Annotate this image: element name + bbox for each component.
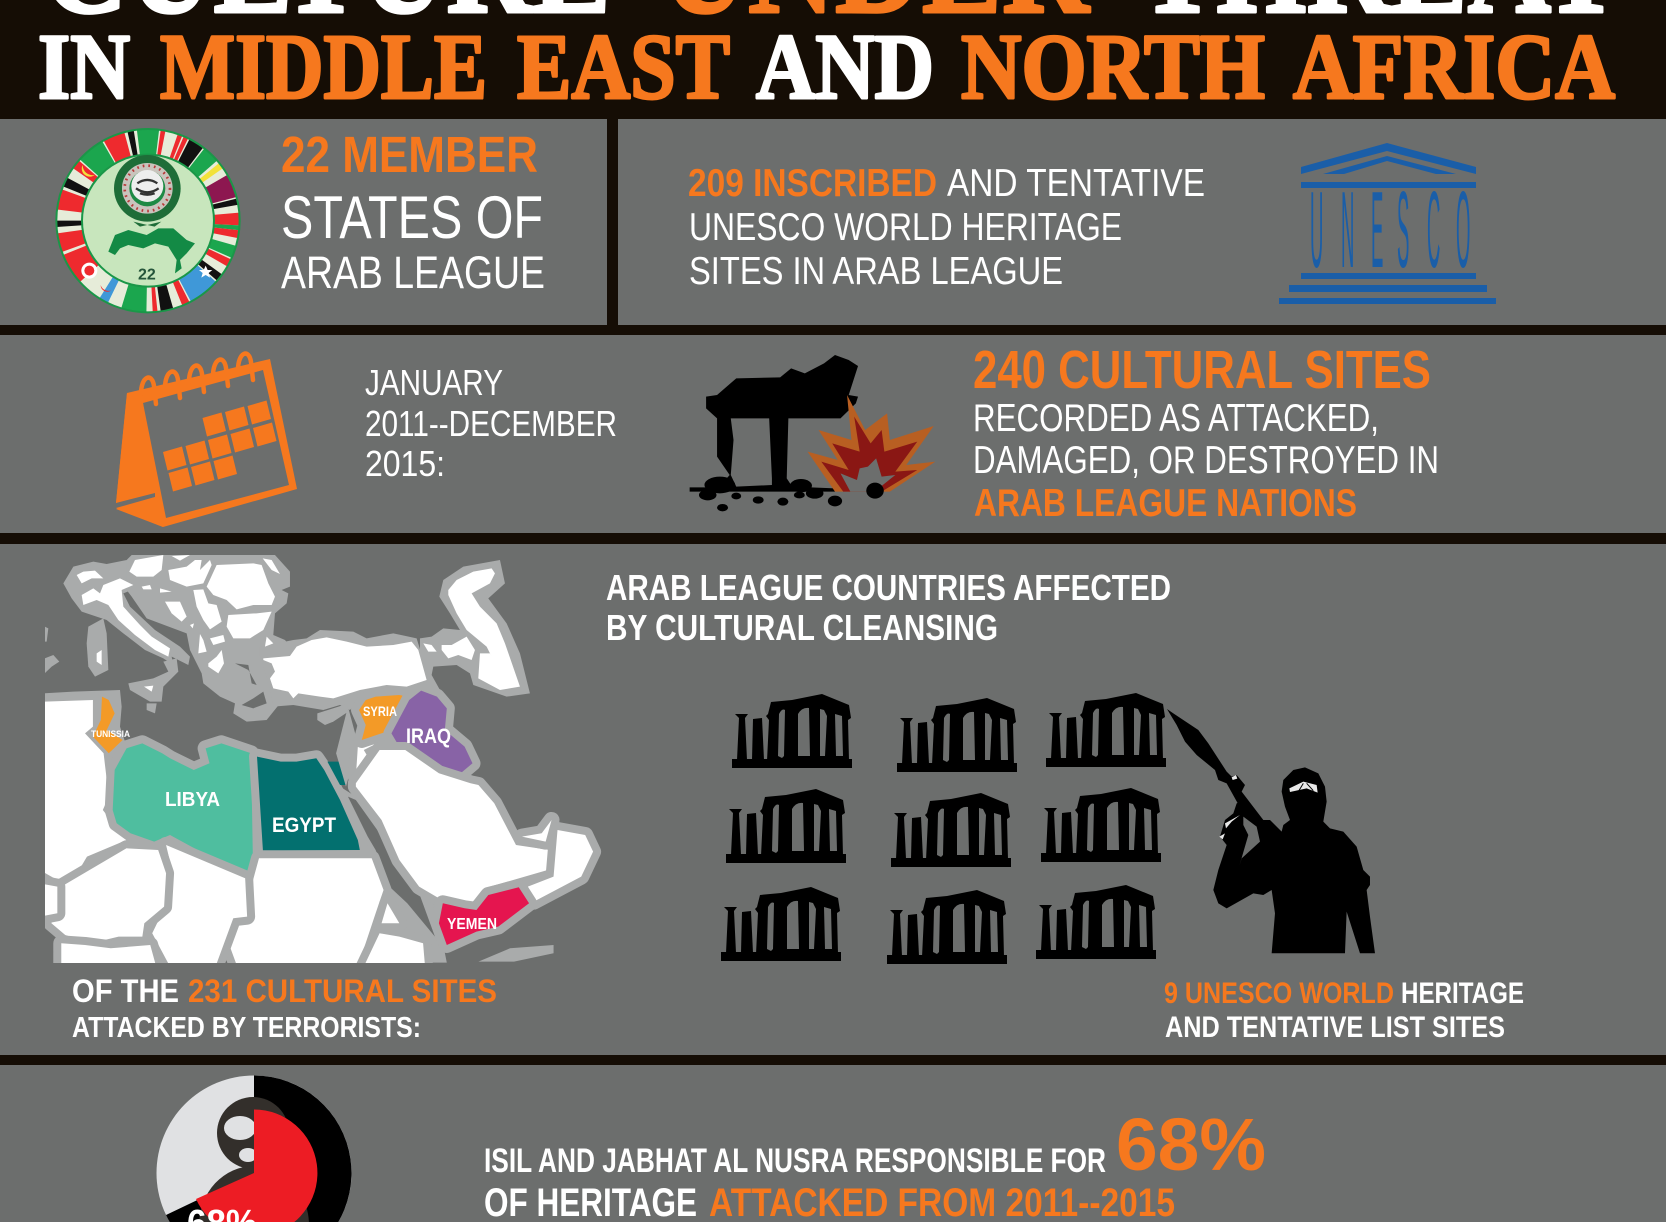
text: date range: 2015:	[365, 443, 445, 484]
map: middle east and north africa	[40, 555, 593, 967]
panel: arab league members	[0, 119, 607, 325]
map label: Egypt: EGYPT	[272, 814, 336, 837]
text: 240 cultural sites: DAMAGED, OR DESTROYED IN	[973, 439, 1439, 482]
text: date range: JANUARY	[365, 362, 503, 403]
text: 22 member states: STATES OF	[281, 184, 543, 251]
text: 9 unesco sites: 9 UNESCO WORLD	[1164, 977, 1394, 1010]
map label: Tunissia: TUNISSIA	[91, 729, 130, 739]
icon: unesco temple logo: UNESCO	[1310, 168, 1470, 291]
map label: Yemen: YEMEN	[447, 916, 497, 933]
heading: countries affected: ARAB LEAGUE COUNTRIES AFFECTED	[606, 567, 1171, 608]
icon: ruin with explosion	[690, 355, 935, 511]
text: 240 cultural sites	[973, 340, 1439, 525]
text: 22 member states: ARAB LEAGUE	[281, 247, 545, 298]
icon: arab league emblem	[56, 129, 240, 313]
map label: Syria: SYRIA	[363, 703, 397, 719]
icon: arab league emblem: 22	[138, 266, 156, 283]
text: isil and jabhat al nusra: ISIL AND JABHAT AL NUSRA RESPONSIBLE FOR	[484, 1142, 1106, 1180]
text: 9 unesco sites: AND TENTATIVE LIST SITES	[1165, 1011, 1505, 1044]
icon: calendar	[116, 354, 297, 527]
panel: responsibility	[0, 1065, 1666, 1222]
text: 231 cultural sites: 231 CULTURAL SITES	[188, 973, 497, 1009]
heading: countries affected	[606, 567, 1171, 648]
panel: cultural sites attacked	[0, 335, 1666, 533]
heading: countries affected: BY CULTURAL CLEANSING	[606, 607, 998, 648]
text: 209 inscribed sites: UNESCO WORLD HERITAGE	[689, 206, 1122, 249]
text: 209 inscribed sites: 209 INSCRIBED	[688, 162, 937, 205]
title line 2: AND	[756, 16, 934, 119]
text: 22 member states: 22 MEMBER	[281, 126, 538, 183]
title line 2: EAST	[517, 16, 730, 119]
text: 209 inscribed sites	[688, 162, 1205, 293]
map label: Libya: LIBYA	[165, 789, 220, 811]
icon: unesco temple logo	[1279, 143, 1496, 304]
title line 1	[42, 0, 1620, 43]
title line 2: AFRICA	[1293, 16, 1615, 119]
text: isil and jabhat al nusra	[484, 1103, 1266, 1222]
text: 240 cultural sites: ARAB LEAGUE NATIONS	[974, 482, 1357, 525]
header band	[0, 0, 1666, 119]
text: 209 inscribed sites: SITES IN ARAB LEAGUE	[689, 250, 1063, 293]
text: 240 cultural sites: 240 CULTURAL SITES	[973, 340, 1431, 400]
text: date range: 2011--DECEMBER	[365, 403, 617, 444]
icon: nine temple silhouettes	[721, 693, 1166, 964]
text: 9 unesco sites: HERITAGE	[1401, 977, 1524, 1010]
text: 22 member states	[281, 126, 545, 298]
chart: 68 percent pie with figure	[156, 1076, 352, 1222]
text: 209 inscribed sites: AND TENTATIVE	[947, 162, 1205, 205]
text: isil and jabhat al nusra: 68%	[1116, 1103, 1266, 1186]
title line 2: MIDDLE	[160, 16, 487, 119]
title line 2: NORTH	[961, 16, 1265, 119]
text: 231 cultural sites: OF THE	[72, 973, 179, 1009]
panel: countries affected	[0, 544, 1666, 1055]
text: 231 cultural sites: ATTACKED BY TERRORISTS:	[72, 1012, 421, 1044]
text: 231 cultural sites	[72, 973, 497, 1044]
title line 2	[38, 16, 1615, 119]
icon: fighter with rocket launcher	[1167, 709, 1375, 953]
title line 2: IN	[38, 16, 130, 119]
text: date range	[365, 362, 617, 484]
text: 9 unesco sites	[1164, 977, 1524, 1044]
panel: unesco sites	[618, 119, 1666, 325]
map label: Iraq: IRAQ	[406, 725, 451, 748]
text: 240 cultural sites: RECORDED AS ATTACKED,	[973, 397, 1379, 440]
